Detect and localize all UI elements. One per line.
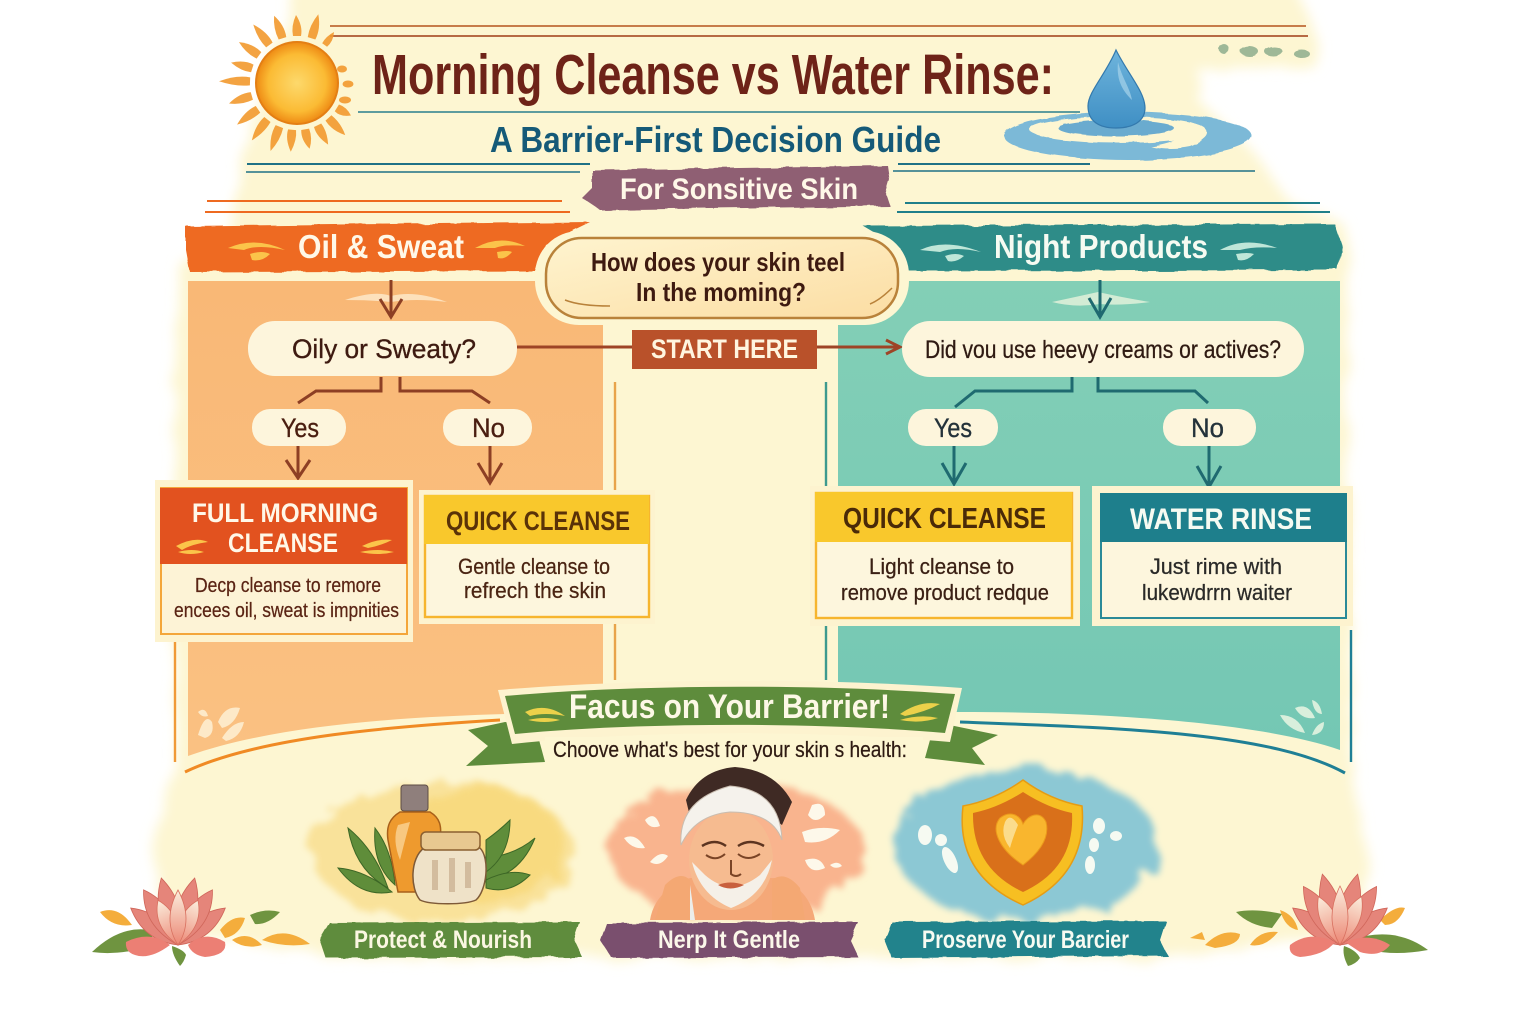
card: quick cleanse right: remove product redque (841, 580, 1049, 605)
corner leaves right (1280, 700, 1324, 735)
header rules (205, 26, 1330, 212)
corner leaves (198, 708, 244, 741)
wisp decorations behind arrows (345, 294, 447, 302)
card: full morning cleanse: CLEANSE (228, 528, 338, 558)
start here box (632, 330, 817, 369)
focus banner: Choove what's best for your skin s health: (553, 737, 907, 762)
card: quick cleanse right (810, 486, 1080, 626)
card: quick cleanse left (419, 490, 655, 624)
card: quick cleanse left: QUICK CLEANSE (446, 506, 630, 536)
icon: water drop and ripples (1004, 50, 1252, 160)
wisp decoration right (1052, 292, 1150, 306)
card: full morning cleanse: Decp cleanse to remore (195, 575, 381, 597)
label: keep it gentle (600, 922, 858, 958)
section header: oil and sweat: Oil & Sweat (298, 228, 464, 265)
start here box: START HERE (651, 334, 798, 364)
section header: night products (863, 224, 1342, 271)
yes pill left (252, 409, 346, 446)
card: quick cleanse left: refrech the skin (464, 578, 606, 603)
label: preserve your barrier: Proserve Your Barcier (922, 926, 1129, 954)
arrows: oil branch (286, 280, 502, 483)
icon: barrier shield (894, 769, 1158, 921)
label: protect and nourish (320, 922, 582, 958)
section header: oil and sweat (186, 222, 590, 272)
central question bubble: In the moming? (636, 277, 806, 307)
central question bubble: How does your skin teel (591, 247, 845, 277)
focus banner (466, 681, 998, 767)
focus banner: Facus on Your Barrier! (569, 688, 890, 726)
card: water rinse: Just rime with (1150, 554, 1282, 579)
question: heavy creams: Did vou use heevy creams or actives? (925, 336, 1281, 364)
card: water rinse: WATER RINSE (1130, 503, 1312, 536)
card: full morning cleanse (155, 480, 413, 642)
label: protect and nourish: Protect & Nourish (354, 926, 532, 954)
no pill left: No (472, 413, 505, 443)
icon: lotus left (92, 876, 310, 966)
panel: night products background (838, 281, 1340, 750)
no pill right: No (1191, 413, 1224, 443)
yes pill right: Yes (934, 413, 972, 443)
section header: night products: Night Products (994, 228, 1208, 265)
decorative leaves top right (1219, 44, 1310, 58)
panel: oil and sweat background (188, 281, 603, 756)
card: water rinse: lukewdrrn waiter (1142, 580, 1292, 605)
question: oily or sweaty (248, 321, 517, 376)
paper background (150, 0, 1368, 958)
yes pill right (908, 409, 998, 446)
card: full morning cleanse: FULL MORNING (192, 498, 378, 528)
icon: sun (219, 13, 354, 152)
question: oily or sweaty: Oily or Sweaty? (292, 334, 476, 364)
icon: protect and nourish products (311, 782, 575, 922)
audience banner (582, 166, 890, 210)
question: heavy creams (902, 321, 1304, 377)
card: quick cleanse right: Light cleanse to (869, 554, 1014, 579)
arrows: night branch (942, 280, 1221, 487)
icon: lotus right (1190, 872, 1428, 966)
no pill right (1163, 409, 1256, 446)
title: Morning Cleanse vs Water Rinse: (372, 43, 1054, 107)
yes pill left: Yes (281, 413, 319, 443)
panel side and footer rules (175, 382, 1351, 773)
card: water rinse (1092, 486, 1353, 626)
central question bubble (535, 231, 909, 325)
card: full morning cleanse: encees oil, sweat is impnities (174, 600, 399, 622)
subtitle: A Barrier-First Decision Guide (490, 119, 941, 160)
label: preserve your barrier (885, 921, 1168, 958)
label: keep it gentle: Nerp It Gentle (658, 926, 800, 954)
audience banner: For Sonsitive Skin (620, 173, 858, 206)
icon: gentle face wash (607, 767, 863, 920)
arrow: start flow lines (517, 340, 900, 354)
card: quick cleanse left: Gentle cleanse to (458, 554, 610, 579)
card: quick cleanse right: QUICK CLEANSE (843, 503, 1046, 535)
no pill left (443, 409, 532, 446)
